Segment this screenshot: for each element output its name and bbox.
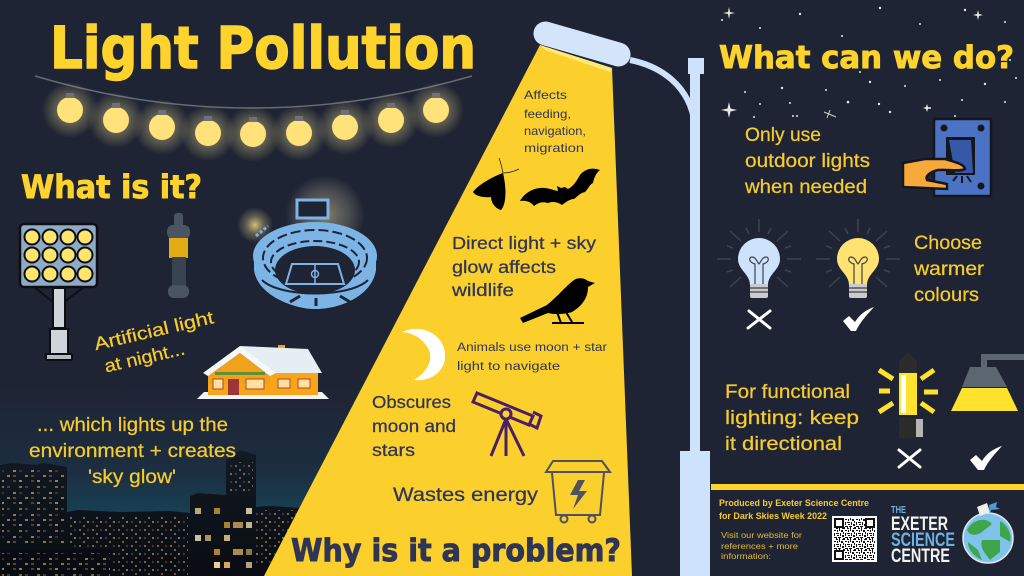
icon: tick xyxy=(970,446,1002,470)
icon: directional lamp xyxy=(951,357,1024,411)
icon: moth xyxy=(473,158,519,210)
title: Light Pollution xyxy=(50,14,476,82)
text: obscures: moon and xyxy=(372,416,456,436)
heading: what can we do: What can we do? xyxy=(719,40,1014,76)
text: direct light: Direct light + sky xyxy=(452,233,596,253)
logo: exeter science centre: EXETER xyxy=(891,514,948,535)
text: artificial light at night: at night... xyxy=(102,338,187,376)
icon: telescope xyxy=(473,393,541,456)
text: only use outdoor lights: outdoor lights xyxy=(745,150,870,172)
text: choose warmer colours: Choose xyxy=(914,232,982,254)
text: artificial light at night xyxy=(92,307,221,378)
front building windows xyxy=(195,508,252,568)
text: direct light: wildlife xyxy=(451,280,514,300)
website text: references + more xyxy=(721,541,798,551)
text: choose warmer colours: warmer xyxy=(913,258,985,280)
city skyline with sky glow xyxy=(0,385,400,576)
qr code xyxy=(832,516,877,562)
text: direct light xyxy=(451,233,596,300)
text: direct light: glow affects xyxy=(452,257,556,277)
text: obscures: Obscures xyxy=(372,392,451,412)
string lights xyxy=(35,76,472,162)
text: only use outdoor lights xyxy=(744,124,870,198)
text: animals use moon: Animals use moon + star xyxy=(457,342,607,354)
street lamp xyxy=(531,19,710,576)
icon: bat xyxy=(520,169,600,206)
icon: house xyxy=(197,345,329,399)
logo: exeter science centre: CENTRE xyxy=(891,546,950,567)
text: lights up the environment: 'sky glow' xyxy=(88,466,176,488)
text: animals use moon xyxy=(457,342,607,373)
heading: why is it a problem: Why is it a problem? xyxy=(291,533,621,569)
icon: cross xyxy=(748,311,770,328)
icon: tick xyxy=(843,307,874,331)
website text: Visit our website for xyxy=(721,530,802,540)
text: wastes energy: Wastes energy xyxy=(393,484,538,506)
logo: exeter science centre: THE xyxy=(891,505,906,516)
text: lights up the environment xyxy=(29,414,236,488)
logo: exeter science centre xyxy=(891,505,955,567)
icon: bin xyxy=(546,461,610,522)
icon: non-directional lamp xyxy=(879,352,938,438)
icon: bird xyxy=(520,278,595,323)
light beam xyxy=(264,45,632,576)
text: animals use moon: light to navigate xyxy=(457,361,560,373)
logo: globe xyxy=(963,502,1013,563)
footer bar xyxy=(711,484,1024,490)
text: affects feeding: feeding, xyxy=(524,107,571,121)
credits text: Produced by Exeter Science Centre xyxy=(719,498,869,509)
text: artificial light at night: Artificial light xyxy=(92,307,215,354)
text: lights up the environment: environment + creates xyxy=(29,440,236,462)
text: lights up the environment: ... which lights up the xyxy=(37,414,228,436)
website text: information: xyxy=(721,551,771,561)
logo: exeter science centre: SCIENCE xyxy=(891,530,955,551)
text: only use outdoor lights: when needed xyxy=(744,176,867,198)
icon: hand and switch xyxy=(903,119,991,196)
website text xyxy=(721,530,802,561)
night stars xyxy=(721,7,1017,118)
heading: what is it: What is it? xyxy=(21,168,202,206)
text: affects feeding: migration xyxy=(524,141,584,155)
credits text xyxy=(719,498,869,522)
text: functional lighting: For functional xyxy=(725,381,850,403)
text: obscures xyxy=(372,392,456,460)
text: affects feeding xyxy=(524,88,586,155)
text: affects feeding: navigation, xyxy=(524,124,586,138)
icon: warm bulb with rays xyxy=(816,219,900,298)
text: functional lighting xyxy=(725,381,859,455)
text: affects feeding: Affects xyxy=(524,88,567,102)
icon: cool bulb with rays xyxy=(717,219,801,298)
icon: floodlight xyxy=(20,224,97,360)
icon: cross xyxy=(899,450,920,467)
text: functional lighting: it directional xyxy=(725,433,842,455)
icon: stadium xyxy=(237,175,377,309)
text: obscures: stars xyxy=(372,440,415,460)
icon: moon xyxy=(402,329,445,380)
credits text: for Dark Skies Week 2022 xyxy=(719,511,827,522)
text: functional lighting: lighting: keep xyxy=(725,407,859,429)
text: choose warmer colours: colours xyxy=(914,284,979,306)
text: choose warmer colours xyxy=(913,232,985,306)
text: only use outdoor lights: Only use xyxy=(745,124,821,146)
icon: bollard light xyxy=(167,213,190,298)
